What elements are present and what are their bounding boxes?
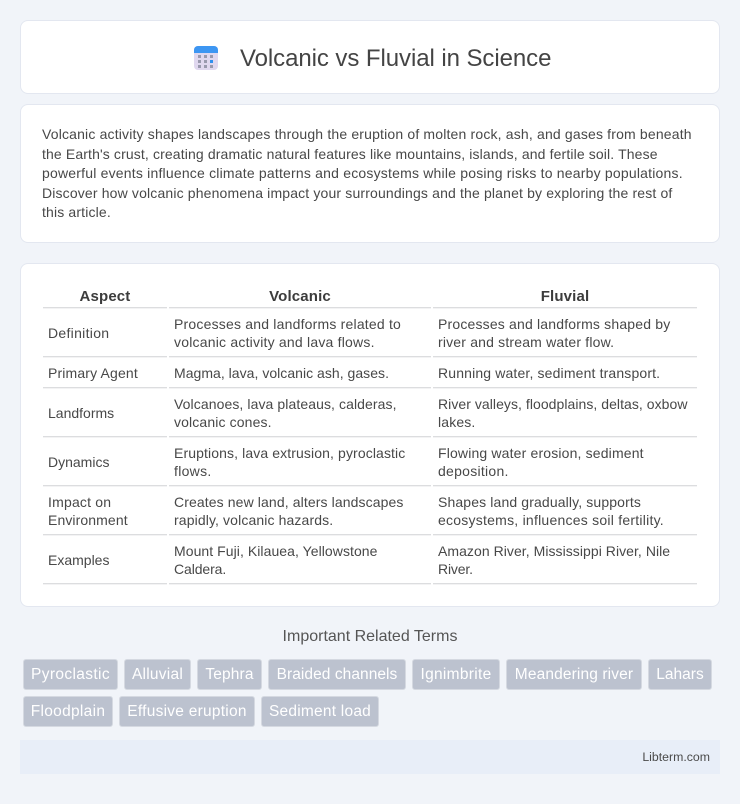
related terms heading: Important Related Terms [283,628,457,645]
row: Impact on Environment: Environment [48,512,128,528]
row: Dynamics: flows. [174,463,212,479]
row: Dynamics: deposition. [438,463,509,479]
row: Impact on Environment: Creates new land, alters landscapes [174,494,404,510]
row: Examples: Amazon River, Mississippi River, Nile [438,543,670,559]
row: Landforms: Landforms [48,405,114,421]
row: Dynamics [48,445,644,479]
footer credit: Libterm.com [642,750,710,764]
row: Definition: Processes and landforms shaped by [438,316,670,332]
header card [20,20,720,94]
row: Definition [48,316,670,350]
row: Landforms: lakes. [438,414,475,430]
row: Definition: river and stream water flow. [438,334,614,350]
related term tags: Braided channels [277,666,397,683]
row: Examples: River. [438,561,473,577]
row: Examples: Mount Fuji, Kilauea, Yellowstone [174,543,378,559]
row: Landforms: Volcanoes, lava plateaus, calderas, [174,396,397,412]
icon: calendar [194,46,218,70]
table header: Volcanic [269,288,331,305]
row: Dynamics: Dynamics [48,454,109,470]
comparison table panel [20,263,720,607]
related term tags: Lahars [656,666,704,683]
row: Impact on Environment [48,494,664,528]
related term tags: Meandering river [515,666,633,683]
row: Primary Agent [48,365,660,381]
related term tags: Sediment load [269,703,371,720]
related term tags: Pyroclastic [31,666,110,683]
table header: Fluvial [541,288,589,305]
table header [80,288,589,305]
row: Primary Agent: Primary Agent [48,365,138,381]
row: Primary Agent: Magma, lava, volcanic ash, gases. [174,365,389,381]
related term tags: Tephra [205,666,254,683]
row: Impact on Environment: Shapes land gradually, supports [438,494,641,510]
related term tags: Effusive eruption [127,703,247,720]
intro paragraph [42,126,692,220]
row: Landforms: River valleys, floodplains, deltas, oxbow [438,396,688,412]
row: Primary Agent: Running water, sediment transport. [438,365,660,381]
footer bar [20,740,720,774]
row: Examples: Caldera. [174,561,226,577]
row: Impact on Environment: ecosystems, influences soil fertility. [438,512,664,528]
intro paragraph: powerful events influence climate patterns and ecosystems while posing risks to nearby populations. [42,165,683,181]
row: Definition: volcanic activity and lava flows. [174,334,375,350]
related term tags: Floodplain [31,703,105,720]
row: Landforms [48,396,688,430]
intro paragraph: Discover how volcanic phenomena impact your surroundings and the planet by exploring the rest of [42,185,672,201]
related term tags: Alluvial [132,666,183,683]
row: Landforms: volcanic cones. [174,414,272,430]
row: Dynamics: Flowing water erosion, sediment [438,445,644,461]
intro text panel [20,104,720,243]
intro paragraph: Volcanic activity shapes landscapes through the eruption of molten rock, ash, and gases from beneath [42,126,692,142]
related term tags: Ignimbrite [420,666,492,683]
row: Examples [48,543,670,577]
row: Impact on Environment: rapidly, volcanic hazards. [174,512,333,528]
intro paragraph: this article. [42,204,111,220]
row: Dynamics: Eruptions, lava extrusion, pyroclastic [174,445,405,461]
row: Impact on Environment: Impact on [48,494,111,510]
title: Volcanic vs Fluvial in Science [240,45,551,72]
row: Definition: Definition [48,325,109,341]
intro paragraph: the Earth's crust, creating dramatic natural features like mountains, islands, and fertile soil. These [42,146,658,162]
table header: Aspect [80,288,130,305]
row: Examples: Examples [48,552,109,568]
row: Definition: Processes and landforms related to [174,316,401,332]
related term tags [23,659,712,727]
